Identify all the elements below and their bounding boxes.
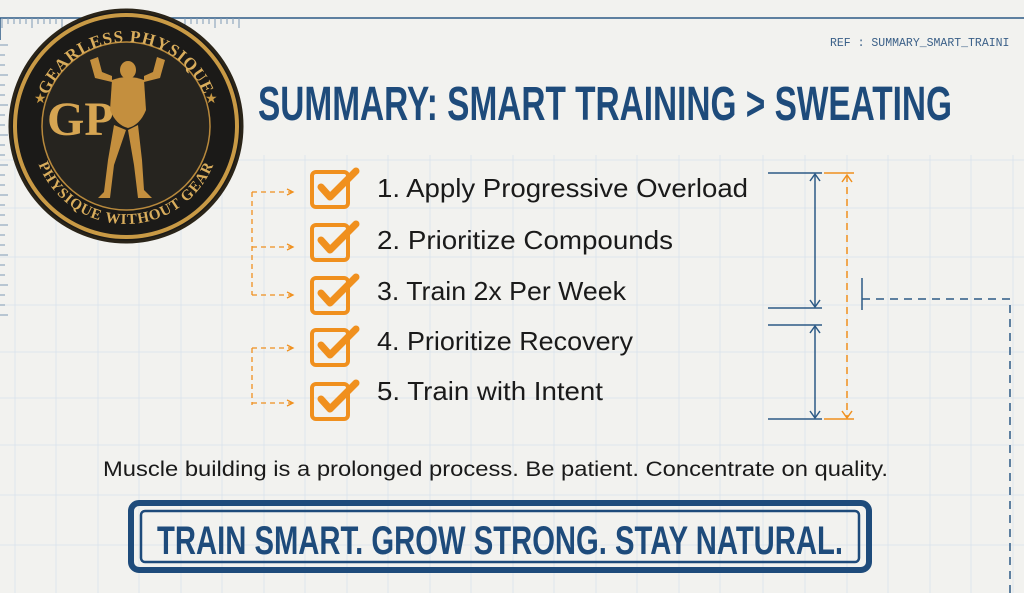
logo badge: ★	[205, 92, 218, 107]
dimension lines	[768, 173, 1010, 593]
logo badge: ★	[34, 92, 47, 107]
stamp banner	[131, 503, 869, 570]
dashed connector arrows	[252, 189, 293, 406]
tagline: Muscle building is a prolonged process. Be patient. Concentrate on quality.	[103, 458, 888, 481]
logo badge: GP	[47, 93, 114, 146]
checklist: 3. Train 2x Per Week	[377, 276, 627, 306]
logo badge	[8, 8, 244, 244]
checklist: 5. Train with Intent	[377, 376, 604, 406]
checklist: 1. Apply Progressive Overload	[377, 173, 748, 203]
logo badge: GEARLESS PHYSIQUE	[40, 30, 214, 94]
logo badge: PHYSIQUE WITHOUT GEAR	[38, 160, 214, 224]
reference code: REF : SUMMARY_SMART_TRAINI	[830, 37, 1009, 50]
checklist	[312, 171, 748, 419]
checklist: 4. Prioritize Recovery	[377, 326, 633, 356]
checklist: 2. Prioritize Compounds	[377, 225, 673, 255]
